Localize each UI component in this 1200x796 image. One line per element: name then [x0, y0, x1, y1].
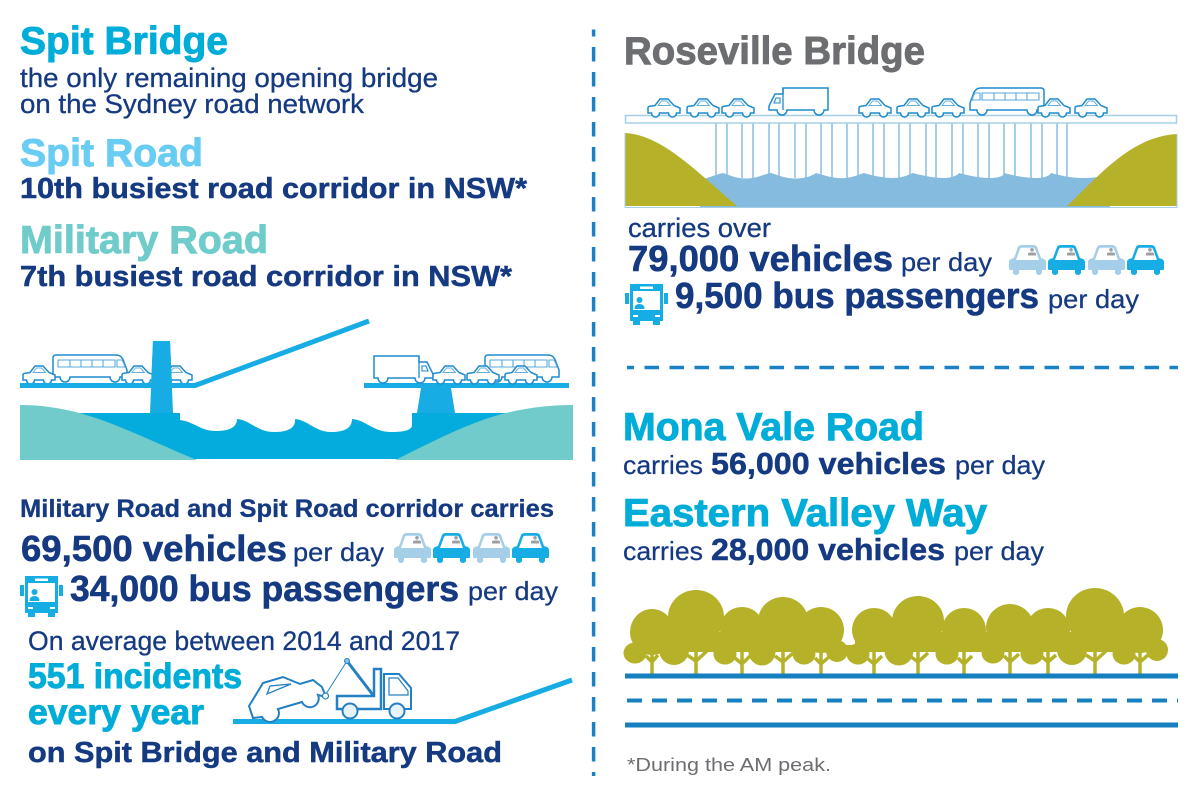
left pier tower — [150, 341, 173, 413]
stat: 551 incidents every year: every year — [28, 693, 204, 732]
panel: Roseville Bridge, right column — [623, 30, 1178, 775]
stat: 34,000 bus passengers per day: 34,000 bus passengers — [70, 568, 459, 609]
text: carries over: carries over — [628, 213, 771, 243]
stat: Eastern Valley Way vehicles: per day — [954, 536, 1044, 566]
central dashed divider — [592, 30, 595, 776]
text: on average: On average between 2014 and 2017 — [28, 626, 460, 656]
heading: Spit Bridge: Spit Bridge — [20, 20, 228, 63]
text block: only remaining opening bridge — [20, 63, 438, 119]
text: corridor carries: Military Road and Spit Road corridor carries — [20, 495, 554, 523]
heading: Military Road: Military Road — [20, 219, 268, 262]
illustration: row of trees and road — [624, 588, 1178, 728]
deck — [626, 116, 1176, 123]
stat: Mona Vale Road vehicles — [623, 446, 1045, 481]
tow cable and hook — [326, 661, 347, 694]
stat: 69,500 vehicles per day: 69,500 vehicles — [21, 528, 287, 569]
right deck — [364, 383, 569, 388]
right pier — [417, 388, 455, 413]
water — [75, 413, 515, 459]
horizontal dashed divider — [627, 366, 1178, 369]
vehicles on right deck — [374, 355, 559, 384]
footnote: *During the AM peak. — [627, 755, 831, 775]
icon: bus — [20, 576, 63, 617]
stat: 9,500 bus passengers per day: 9,500 bus passengers — [675, 275, 1039, 316]
stat: 551 incidents every year: 551 incidents — [28, 657, 242, 696]
text: 7th busiest road corridor: 7th busiest road corridor in NSW* — [20, 261, 513, 293]
heading: Spit Road: Spit Road — [20, 132, 203, 175]
stat: Mona Vale Road vehicles: carries — [623, 450, 703, 480]
stat: 551 incidents every year — [28, 657, 242, 732]
icon: bus — [625, 284, 668, 325]
water — [700, 173, 1110, 208]
text: on Spit Bridge and Military Road: on Spit Bridge and Military Road — [28, 737, 502, 769]
text block: only remaining opening bridge: on the Sydney road network — [20, 89, 365, 119]
tree crowns — [624, 588, 1168, 666]
text: 10th busiest road corridor: 10th busiest road corridor in NSW* — [20, 173, 528, 205]
vehicles — [648, 88, 1107, 117]
right hill — [395, 405, 573, 460]
stat: 9,500 bus passengers per day: per day — [1048, 284, 1139, 314]
stat: Eastern Valley Way vehicles: carries — [623, 536, 703, 566]
crashed car — [249, 677, 326, 722]
panel: Spit Bridge, left column — [20, 20, 573, 769]
stat: Mona Vale Road vehicles: 56,000 vehicles — [711, 446, 946, 481]
tree trunks — [646, 640, 1148, 676]
left hill — [20, 405, 197, 460]
icon: four cars — [1009, 245, 1164, 275]
bank frame — [625, 133, 1177, 208]
heading: Mona Vale Road: Mona Vale Road — [623, 406, 924, 449]
heading: Eastern Valley Way: Eastern Valley Way — [623, 492, 987, 535]
vehicles on left deck — [23, 355, 192, 384]
tower front — [151, 341, 172, 385]
stat: Mona Vale Road vehicles: per day — [955, 450, 1045, 480]
text block: only remaining opening bridge: the only remaining opening bridge — [20, 63, 438, 93]
illustration: tow truck and crashed car — [233, 658, 572, 722]
left hill — [625, 133, 737, 206]
stat: 79,000 vehicles per day: per day — [901, 247, 992, 277]
piers — [716, 123, 1067, 178]
road lines — [625, 674, 1178, 678]
tow truck — [347, 661, 373, 695]
stat: 79,000 vehicles per day: 79,000 vehicles — [628, 238, 893, 279]
heading: Roseville Bridge: Roseville Bridge — [624, 30, 925, 73]
right hill — [1067, 134, 1177, 206]
illustration: Roseville Bridge — [625, 88, 1177, 208]
stat: Eastern Valley Way vehicles — [623, 532, 1044, 567]
icon: four cars — [394, 533, 549, 563]
stat: 69,500 vehicles per day: per day — [293, 537, 384, 567]
stat: Eastern Valley Way vehicles: 28,000 vehicles — [711, 532, 945, 567]
left deck and raised leaf — [20, 321, 369, 386]
illustration: Spit Bridge opening span — [20, 321, 573, 460]
stat: 34,000 bus passengers per day: per day — [468, 576, 558, 606]
road ramp — [233, 680, 572, 722]
